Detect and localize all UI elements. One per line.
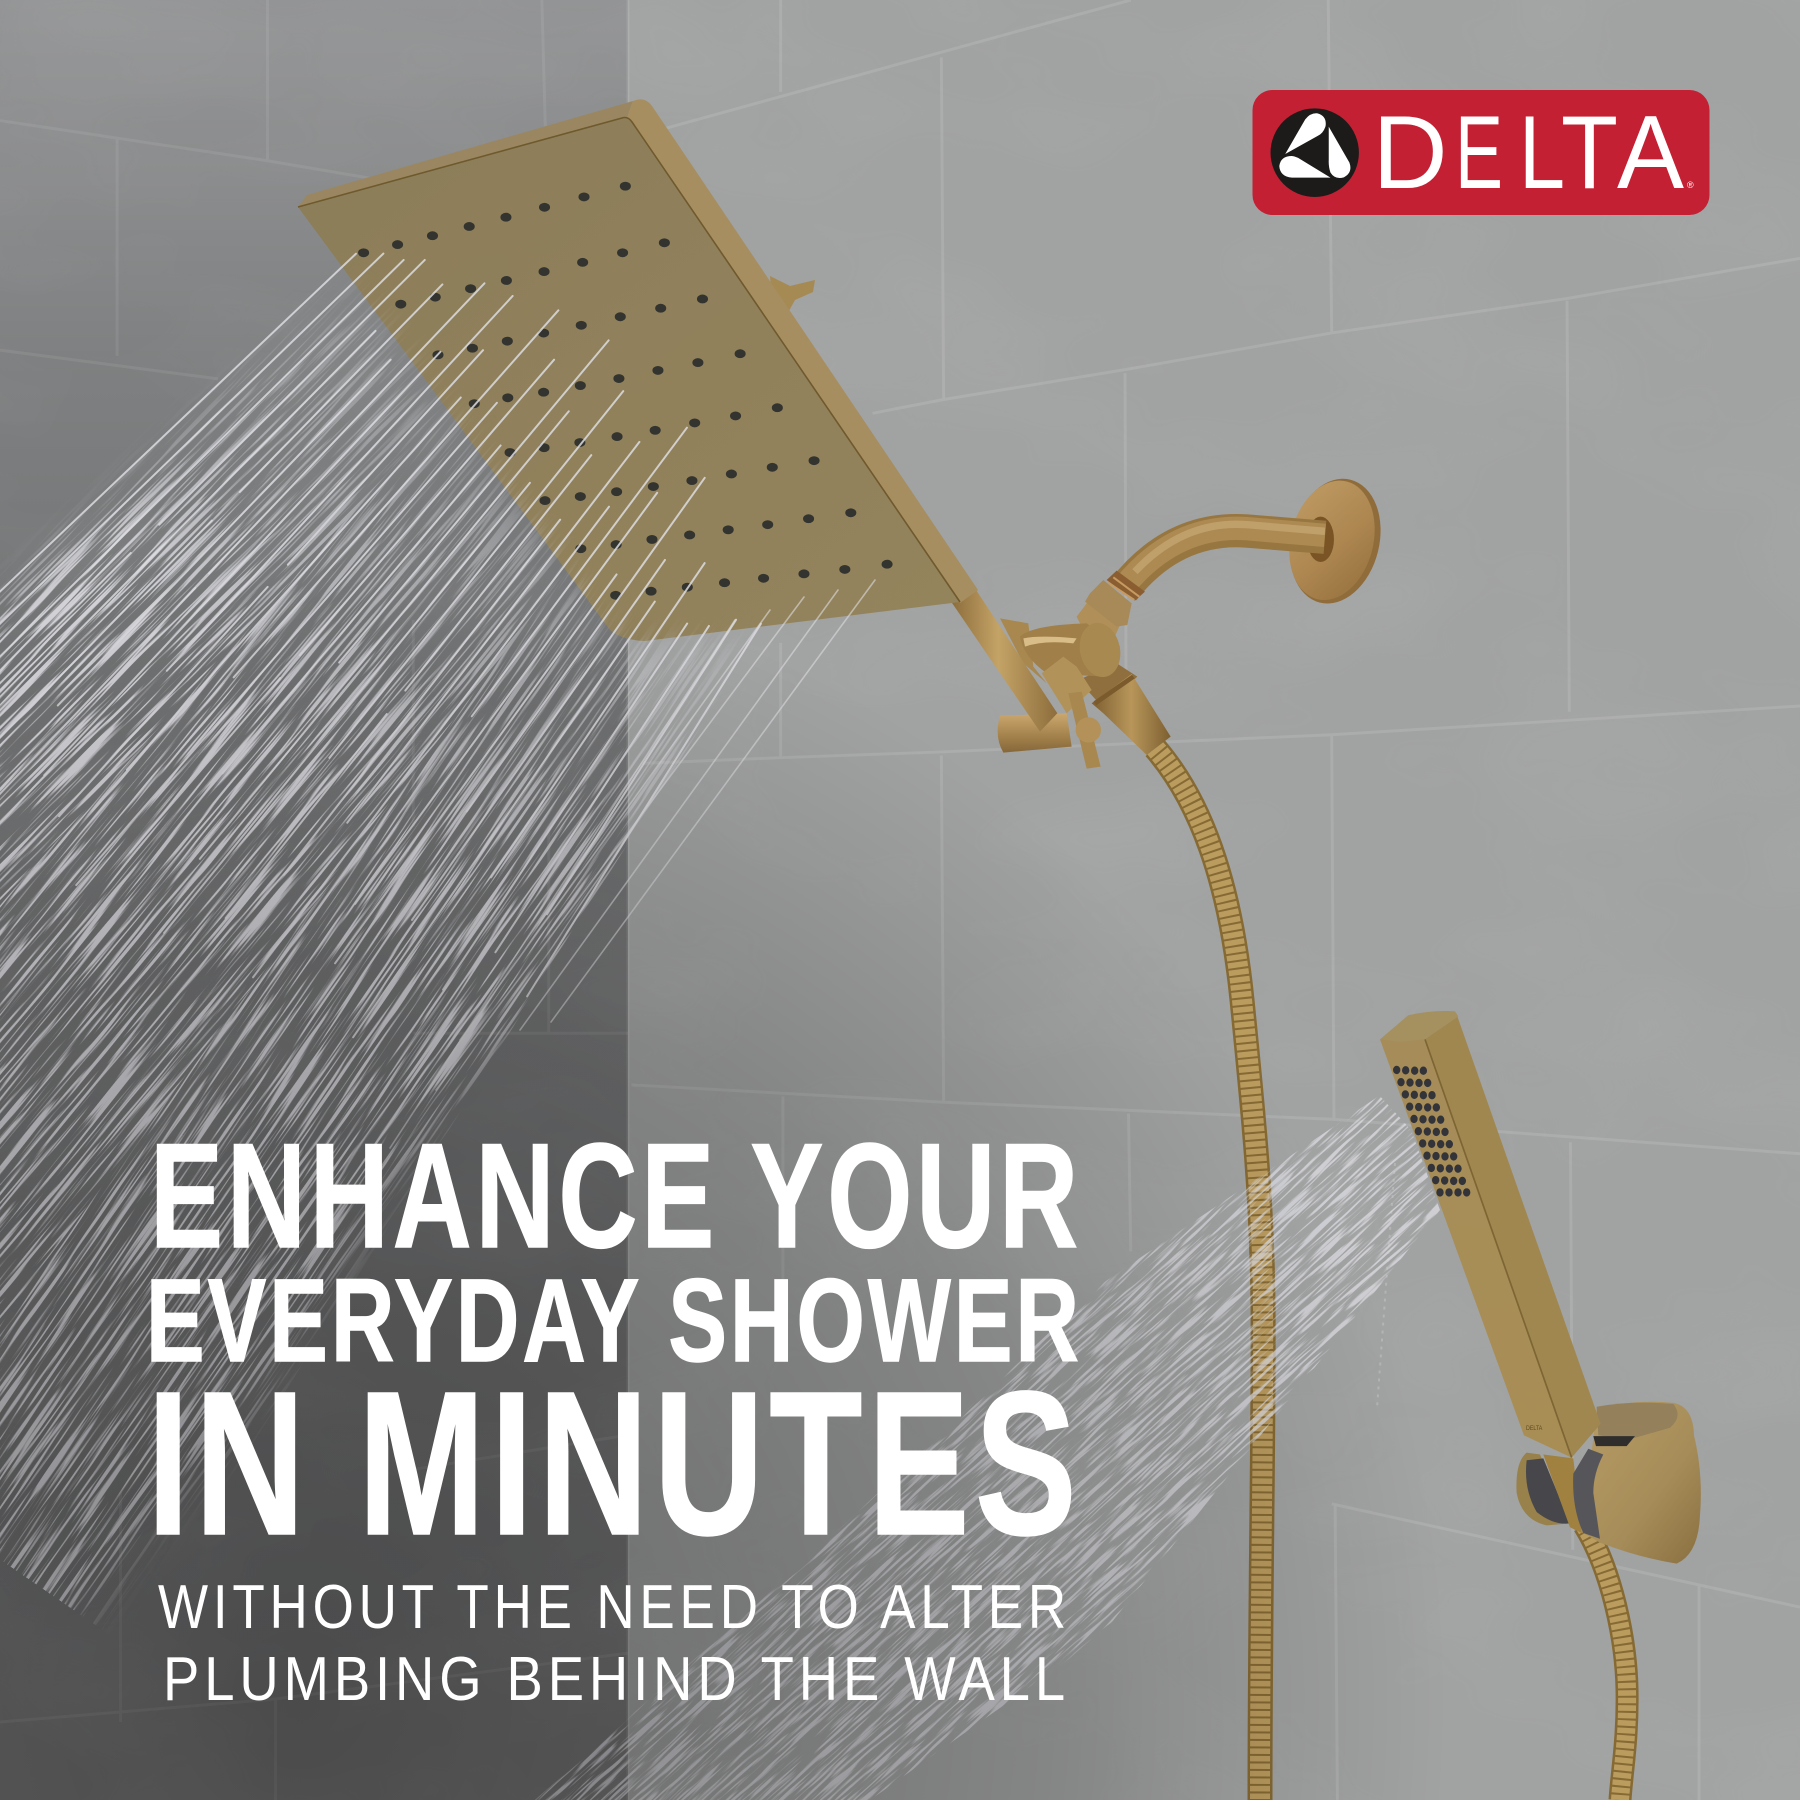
water spray from hand shower xyxy=(1111,1163,1395,1417)
wordmark: E xyxy=(1455,95,1503,211)
spray holes xyxy=(364,186,887,595)
subheading line 2: PLUMBING BEHIND THE WALL xyxy=(163,1645,1070,1714)
headline xyxy=(146,1112,1082,1578)
icon: hand shower and wall holder xyxy=(1380,1011,1701,1564)
logo: Delta xyxy=(1252,90,1710,215)
holder hose xyxy=(1584,1525,1627,1800)
wordmark: L xyxy=(1519,95,1565,211)
water spray from rain head xyxy=(0,254,875,1148)
subheading xyxy=(158,1573,1071,1714)
icon: delta triangle mark xyxy=(1271,108,1359,197)
spray nozzles xyxy=(1397,1070,1467,1192)
icon: knob behind shower head xyxy=(770,276,815,318)
brand mark on handle: DELTA xyxy=(1526,1426,1543,1432)
subheading line 1: WITHOUT THE NEED TO ALTER xyxy=(158,1573,1071,1642)
wordmark: A xyxy=(1617,95,1685,211)
shower hose from diverter xyxy=(1155,748,1263,1800)
wordmark: D xyxy=(1372,95,1448,211)
headline line 2: EVERYDAY SHOWER xyxy=(146,1255,1082,1387)
headline line 1: ENHANCE YOUR xyxy=(150,1112,1082,1279)
icon: rain shower head xyxy=(298,99,978,641)
wordmark: T xyxy=(1561,95,1618,211)
registered mark: ® xyxy=(1687,180,1694,190)
wordmark xyxy=(1372,95,1685,211)
icon: shower arm, flange and diverter xyxy=(950,469,1393,769)
headline line 3: IN MINUTES xyxy=(147,1349,1082,1578)
